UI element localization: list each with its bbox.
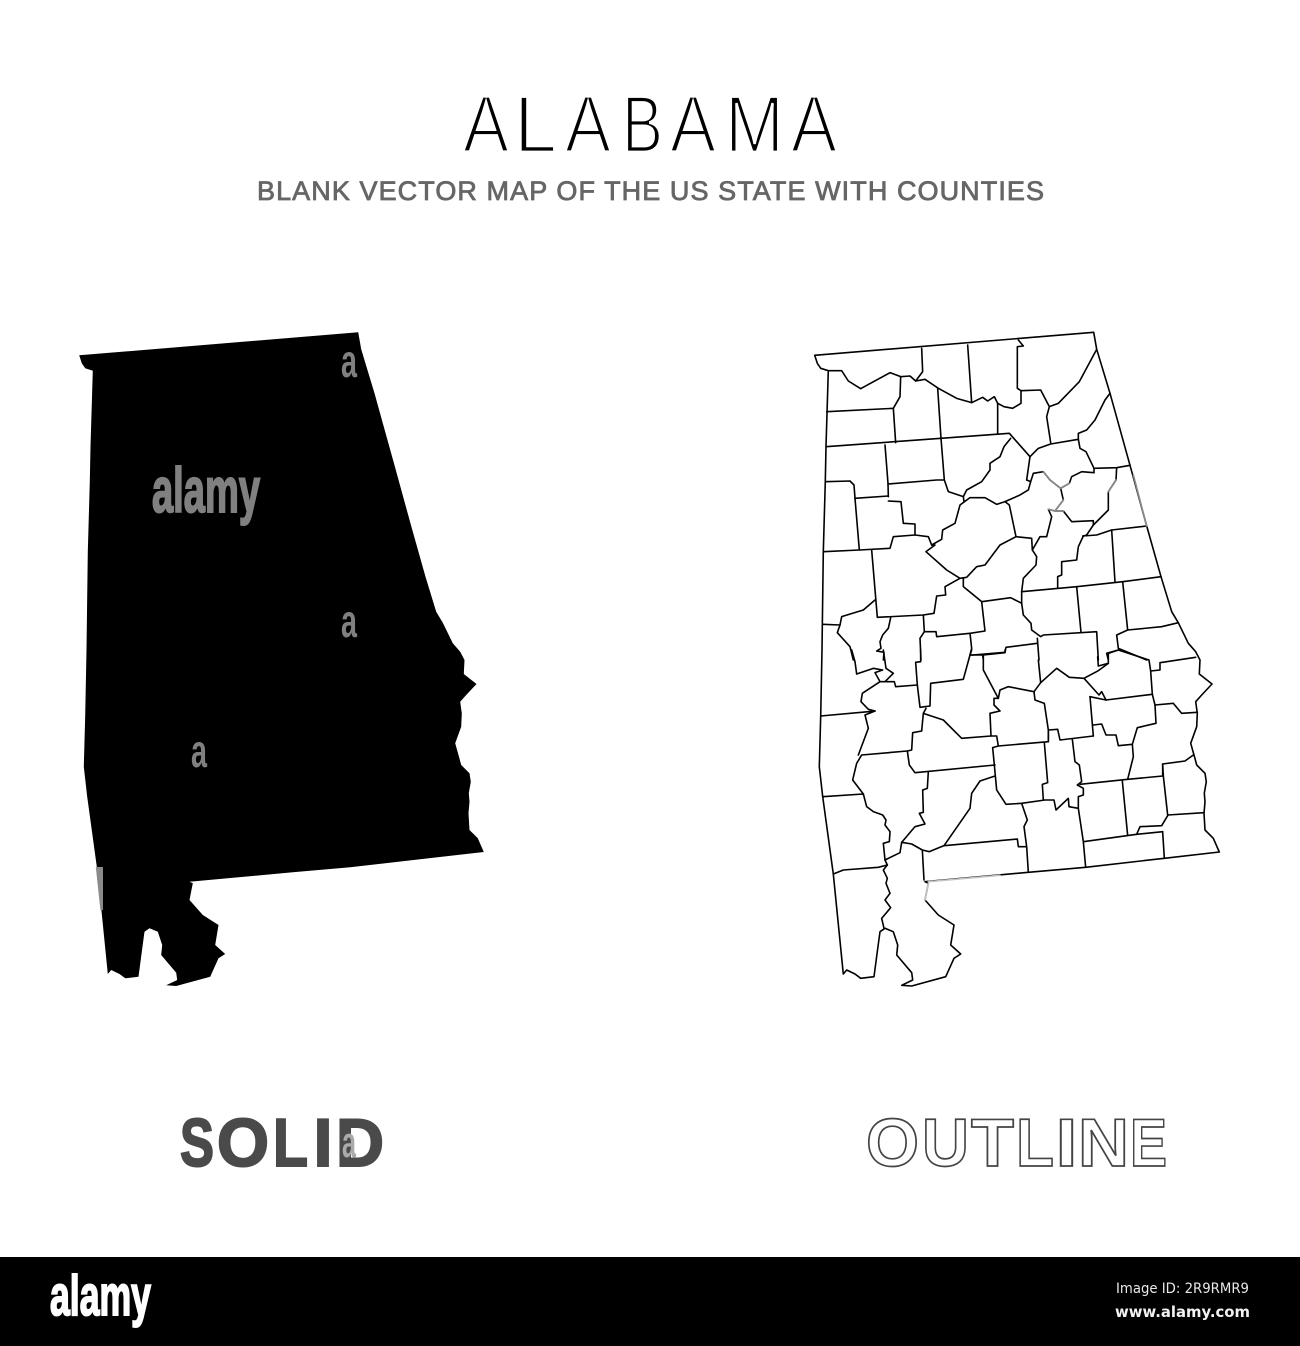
- solid map of Alabama: [79, 332, 484, 986]
- label: outline: N: [1078, 1105, 1129, 1181]
- label: outline: U: [922, 1105, 969, 1181]
- label: solid: O: [217, 1105, 269, 1181]
- label: outline: I: [1056, 1105, 1078, 1181]
- label: outline: L: [1016, 1105, 1054, 1181]
- label: solid: D: [336, 1105, 384, 1181]
- label: solid: S: [180, 1105, 214, 1181]
- footer logo: alamy: [50, 1264, 151, 1328]
- image id: Image ID: 2R9RMR9: [1116, 1281, 1249, 1297]
- label: outline: O: [866, 1105, 919, 1181]
- label: outline: E: [1130, 1105, 1167, 1181]
- title: A: [463, 80, 509, 170]
- label: solid: L: [273, 1105, 308, 1181]
- watermark gap on south border: [925, 875, 1000, 900]
- watermark: grey sliver on left edge: [96, 867, 103, 910]
- title: [463, 80, 837, 170]
- county lines south: [821, 650, 1204, 928]
- county lines north: [823, 340, 1178, 660]
- state border: [815, 332, 1219, 986]
- watermark: letter a lower: a: [191, 725, 207, 777]
- label: outline: [866, 1105, 1167, 1181]
- title: A: [670, 80, 716, 170]
- title: L: [514, 80, 557, 170]
- label: outline: T: [971, 1105, 1014, 1181]
- outline map of Alabama: [815, 332, 1219, 986]
- watermark: letter a middle: a: [341, 595, 357, 647]
- title: A: [565, 80, 611, 170]
- watermark: letter a top: a: [341, 335, 357, 387]
- label: solid: [180, 1105, 384, 1181]
- watermark: alamy on solid map: alamy: [152, 456, 260, 526]
- footer band: [0, 1257, 1300, 1346]
- title: M: [725, 80, 784, 170]
- title: A: [791, 80, 837, 170]
- label: solid: I: [314, 1105, 332, 1181]
- title: B: [622, 80, 663, 170]
- subtitle: BLANK VECTOR MAP OF THE US STATE WITH COUNTIES: [257, 176, 1044, 206]
- watermark tint on county lines: [1043, 472, 1147, 526]
- watermark: letter a on solid label: a: [342, 1118, 356, 1167]
- website: www.alamy.com: [1115, 1303, 1250, 1321]
